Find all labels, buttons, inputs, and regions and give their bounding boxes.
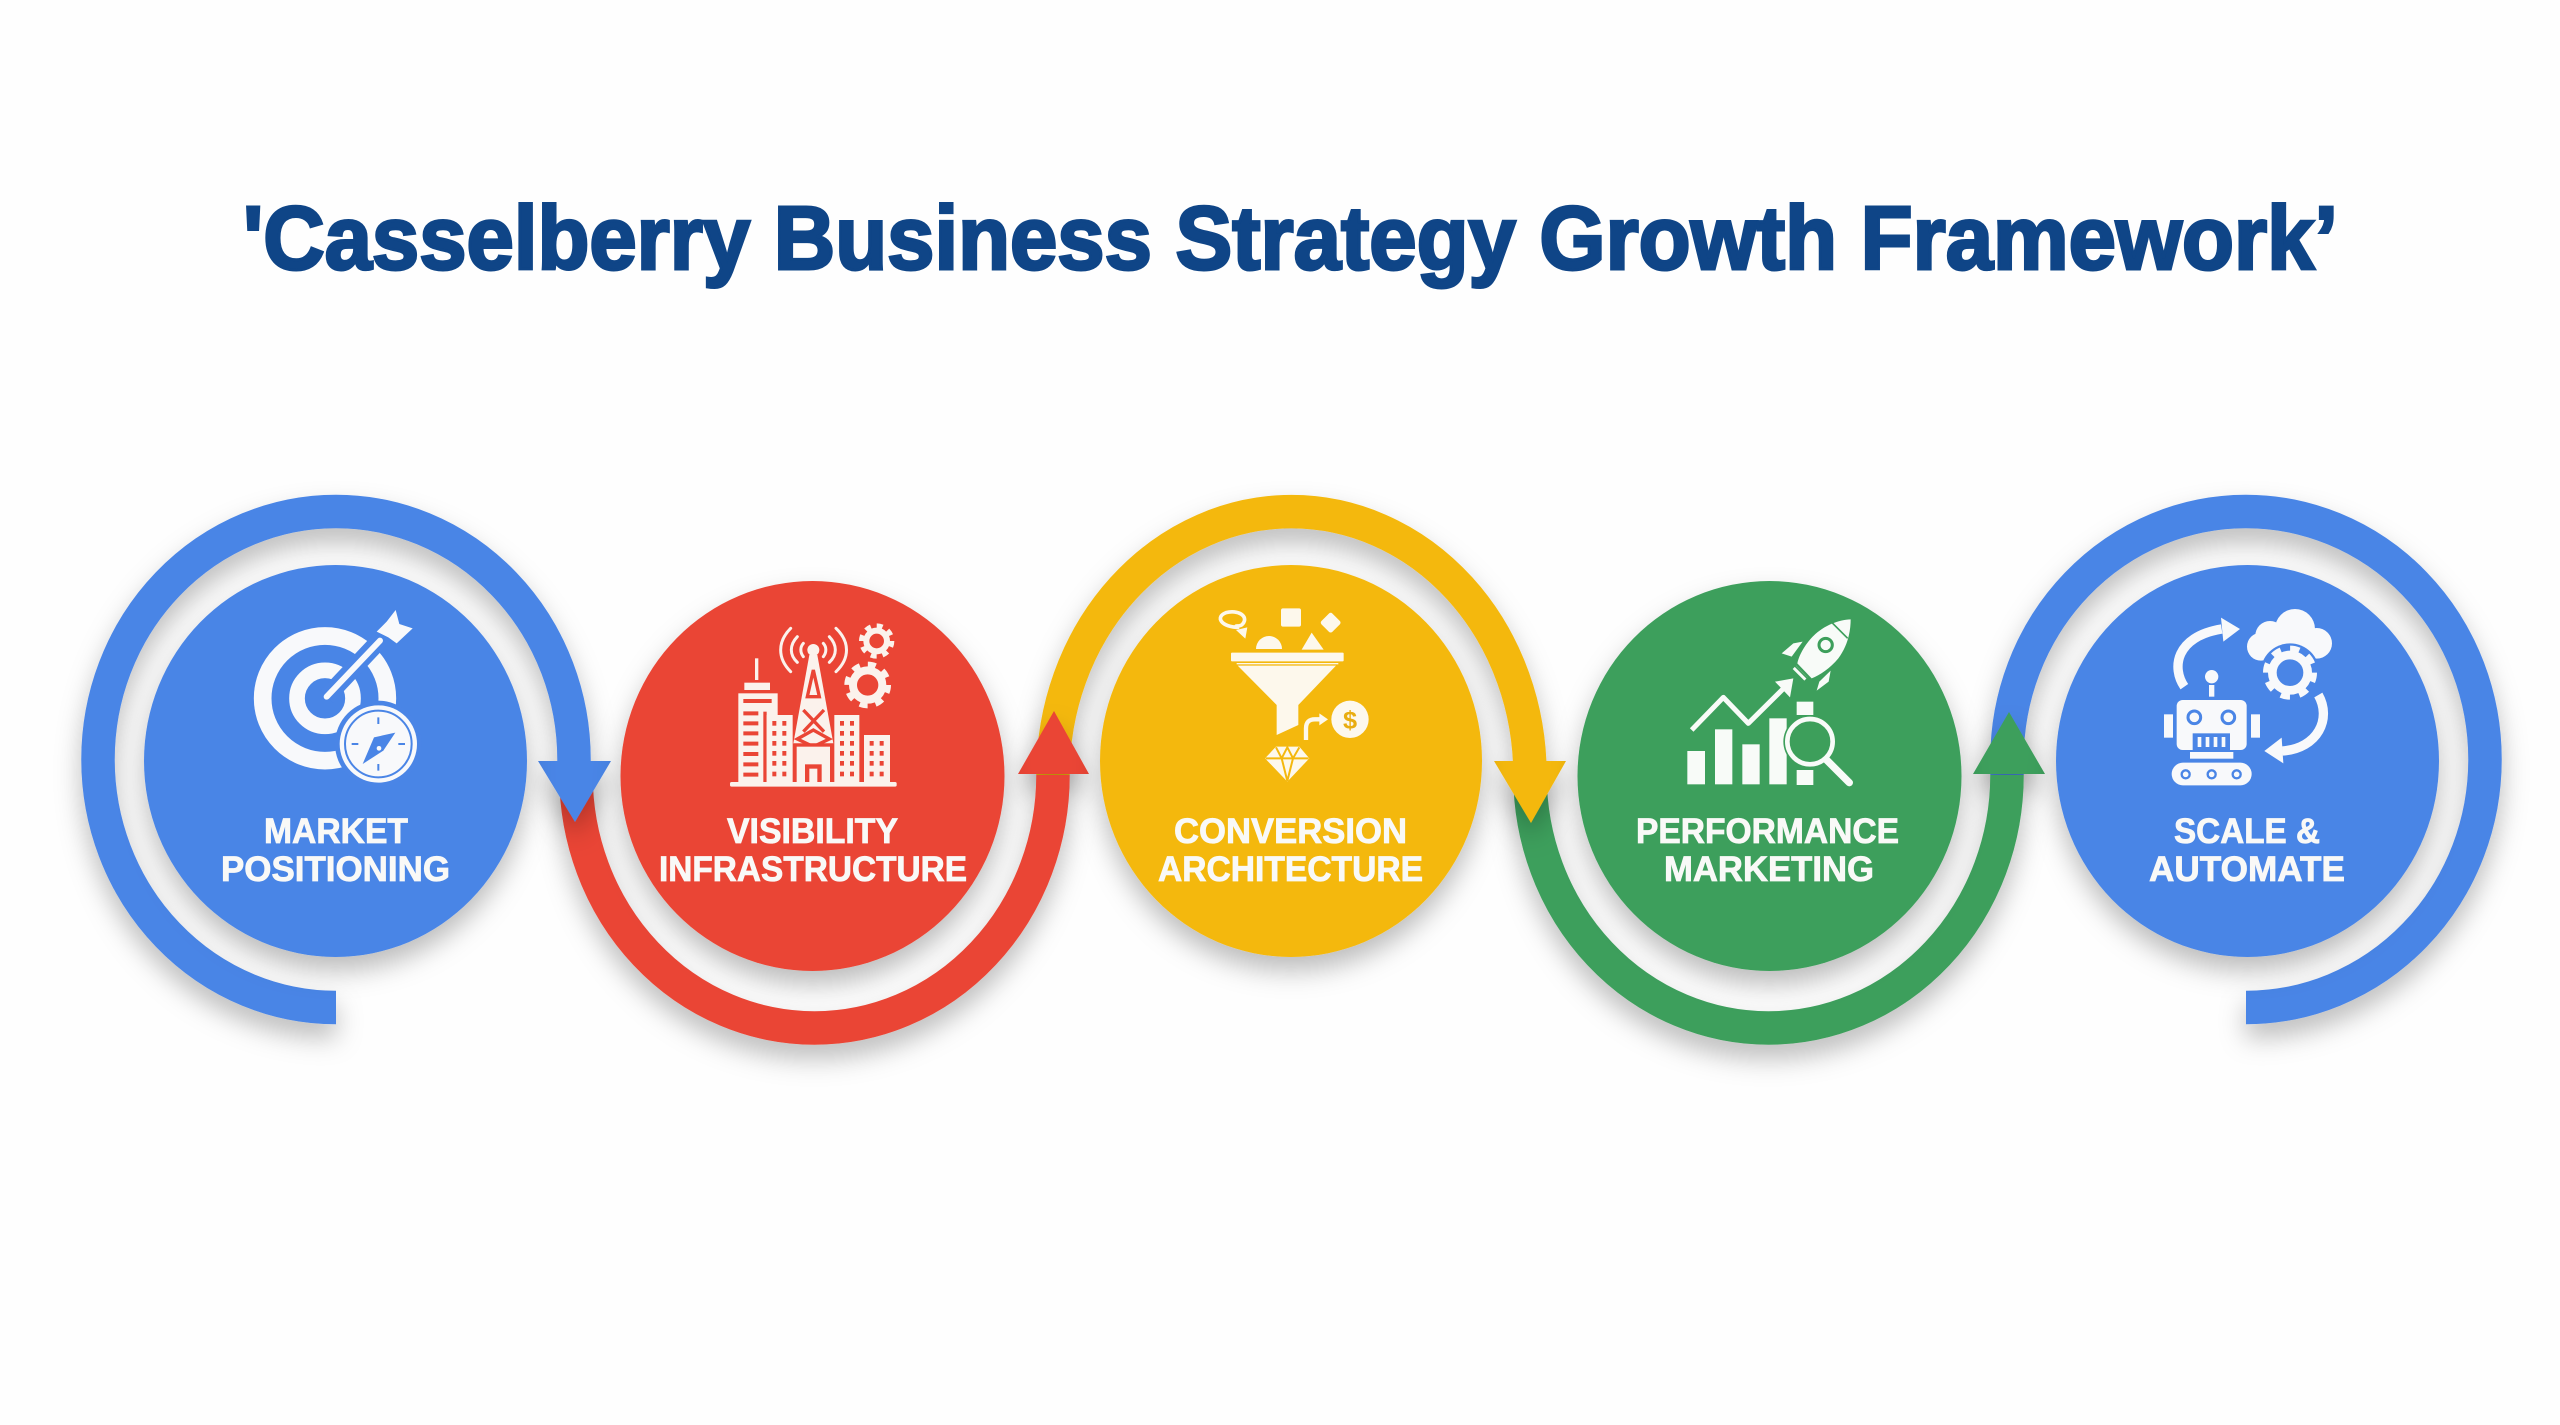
arrow: green arc from performance marketing to scale and automate [1530,712,2045,1028]
panel: visibility infrastructure [620,581,1004,971]
label: scale and automate: SCALE & [2174,812,2320,851]
icon: robot with cloud gear and cycle arrows [2164,609,2332,785]
arrow: blue spiral ring from market positioning to visibility infrastructure [98,512,611,1008]
icon: funnel with shapes, coin and diamond: $ [1343,706,1357,734]
label: market positioning [221,812,450,889]
panel: performance marketing [1578,581,1962,971]
panel: conversion architecture [1100,565,1482,957]
icon: target with arrow and compass [263,610,422,787]
label: conversion architecture [1158,812,1423,889]
label: conversion architecture: CONVERSION [1174,812,1407,851]
icon: funnel with shapes, coin and diamond [1220,608,1369,782]
label: scale and automate [2149,812,2345,889]
arrow: blue spiral ring around scale and automate [2007,512,2485,1008]
arrow: yellow arc from conversion architecture to performance marketing [1053,512,1566,823]
label: performance marketing: MARKETING [1664,850,1874,889]
icon: rocket, growth chart and magnifier [1687,619,1851,785]
panel: market positioning [144,565,527,957]
label: performance marketing: PERFORMANCE [1636,812,1899,851]
label: conversion architecture: ARCHITECTURE [1158,850,1423,889]
label: market positioning: POSITIONING [221,850,450,889]
title: 'Casselberry Business Strategy Growth Framework’ [243,189,2338,289]
label: visibility infrastructure: VISIBILITY [727,812,898,851]
label: scale and automate: AUTOMATE [2149,850,2345,889]
icon: city with radio tower and gears [730,626,897,787]
label: visibility infrastructure [659,812,967,889]
panel: scale and automate [2056,565,2439,957]
label: market positioning: MARKET [264,812,408,851]
arrow: red arc from visibility infrastructure to conversion architecture [576,711,1089,1028]
label: visibility infrastructure: INFRASTRUCTURE [659,850,967,889]
label: performance marketing [1636,812,1899,889]
